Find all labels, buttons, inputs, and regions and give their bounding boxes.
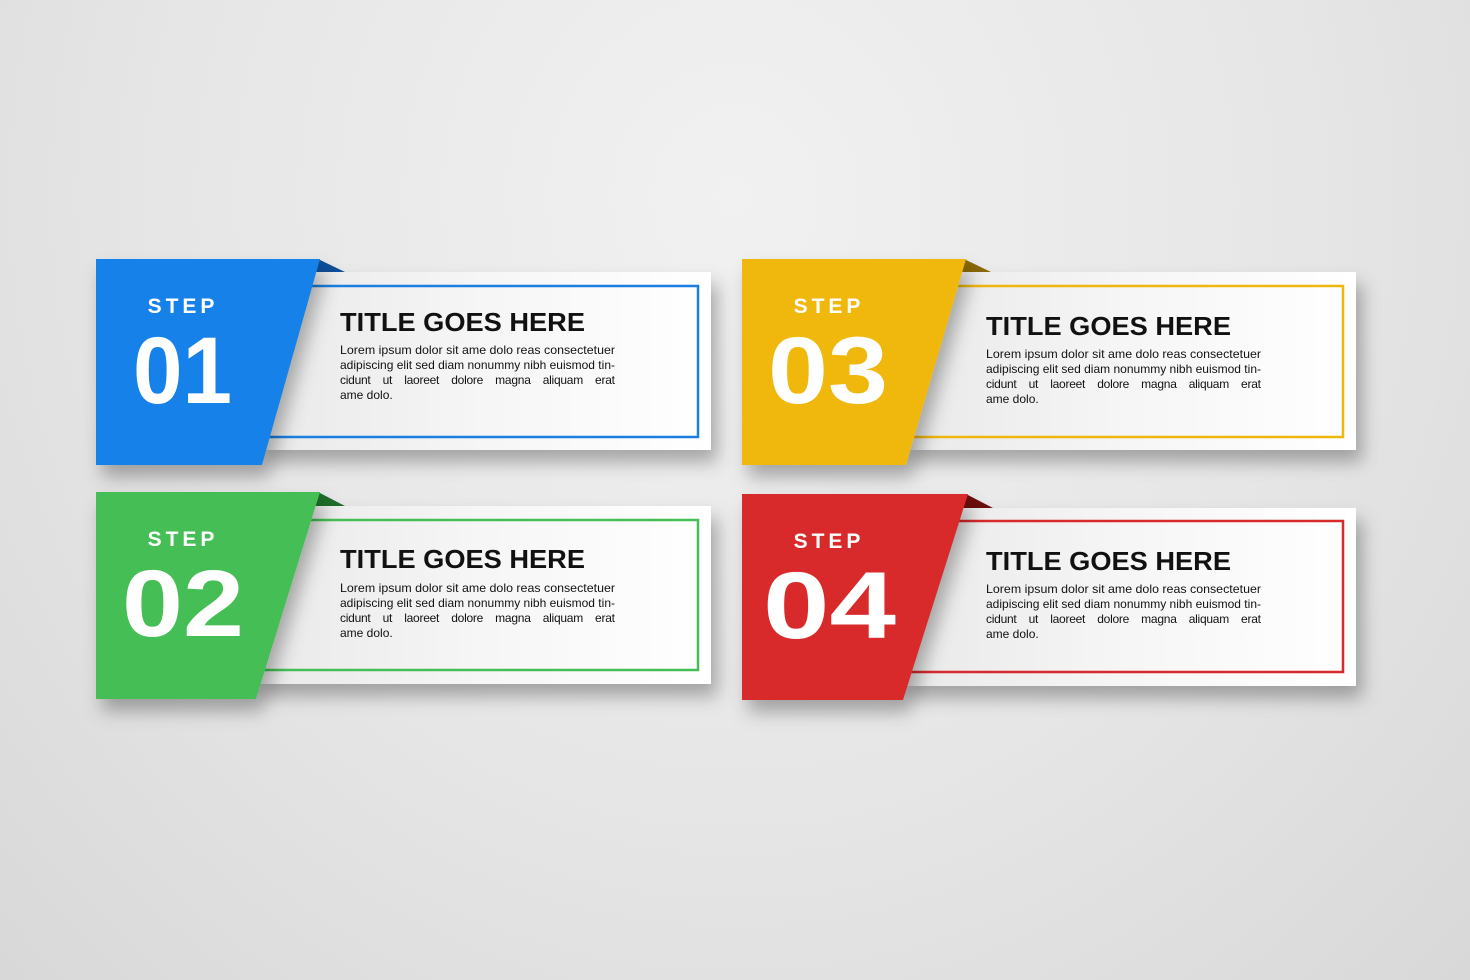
card: step 03 bbox=[742, 259, 1356, 465]
panel: step 03 bbox=[906, 272, 1356, 450]
tab: step 04 bbox=[742, 494, 968, 700]
label: step 03: STEP bbox=[794, 295, 864, 318]
title: step 03: TITLE GOES HERE bbox=[986, 311, 1231, 341]
card: step 01 bbox=[96, 259, 711, 465]
card: step 02 bbox=[96, 492, 711, 699]
number: 01: 01 bbox=[133, 318, 232, 424]
title: step 04: TITLE GOES HERE bbox=[986, 546, 1231, 576]
body: step 04: Lorem ipsum dolor sit ame dolo reas consectetuer bbox=[986, 582, 1261, 596]
panel: step 01 bbox=[262, 272, 711, 450]
title: step 01: TITLE GOES HERE bbox=[340, 307, 585, 337]
body: step 03: adipiscing elit sed diam nonummy nibh euismod tin- bbox=[986, 362, 1261, 376]
tab: step 02 bbox=[96, 492, 320, 699]
body: step 01: cidunt ut laoreet dolore magna aliquam erat bbox=[340, 373, 616, 387]
tab: step 03 bbox=[742, 259, 966, 465]
body: step 01 bbox=[340, 343, 616, 402]
label: step 01: STEP bbox=[148, 295, 218, 318]
number: 04: 04 bbox=[763, 553, 896, 659]
tab: step 01 bbox=[96, 259, 320, 465]
body: step 02: adipiscing elit sed diam nonummy nibh euismod tin- bbox=[340, 596, 615, 610]
body: step 04: cidunt ut laoreet dolore magna aliquam erat bbox=[986, 612, 1262, 626]
fold: step 03 bbox=[959, 259, 991, 272]
body: step 02: Lorem ipsum dolor sit ame dolo reas consectetuer bbox=[340, 581, 615, 595]
label: step 02: STEP bbox=[148, 528, 218, 551]
body: step 02: cidunt ut laoreet dolore magna aliquam erat bbox=[340, 611, 616, 625]
label: step 04: STEP bbox=[794, 530, 864, 553]
body: step 01: ame dolo. bbox=[340, 388, 393, 402]
body: step 03: Lorem ipsum dolor sit ame dolo reas consectetuer bbox=[986, 347, 1261, 361]
body: step 01: Lorem ipsum dolor sit ame dolo reas consectetuer bbox=[340, 343, 615, 357]
fold: step 02 bbox=[313, 492, 345, 506]
body: step 04: ame dolo. bbox=[986, 627, 1039, 641]
body: step 02 bbox=[340, 581, 616, 640]
card: step 04 bbox=[742, 494, 1356, 700]
fold: step 01 bbox=[313, 259, 345, 272]
body: step 03: cidunt ut laoreet dolore magna aliquam erat bbox=[986, 377, 1262, 391]
fold: step 04 bbox=[961, 494, 993, 508]
body: step 04 bbox=[986, 582, 1262, 641]
body: step 04: adipiscing elit sed diam nonummy nibh euismod tin- bbox=[986, 597, 1261, 611]
body: step 02: ame dolo. bbox=[340, 626, 393, 640]
body: step 03 bbox=[986, 347, 1262, 406]
panel: step 02 bbox=[256, 506, 711, 684]
body: step 01: adipiscing elit sed diam nonummy nibh euismod tin- bbox=[340, 358, 615, 372]
number: 03: 03 bbox=[768, 318, 888, 424]
title: step 02: TITLE GOES HERE bbox=[340, 544, 585, 574]
panel: step 04 bbox=[903, 508, 1356, 686]
number: 02: 02 bbox=[122, 551, 244, 657]
body: step 03: ame dolo. bbox=[986, 392, 1039, 406]
